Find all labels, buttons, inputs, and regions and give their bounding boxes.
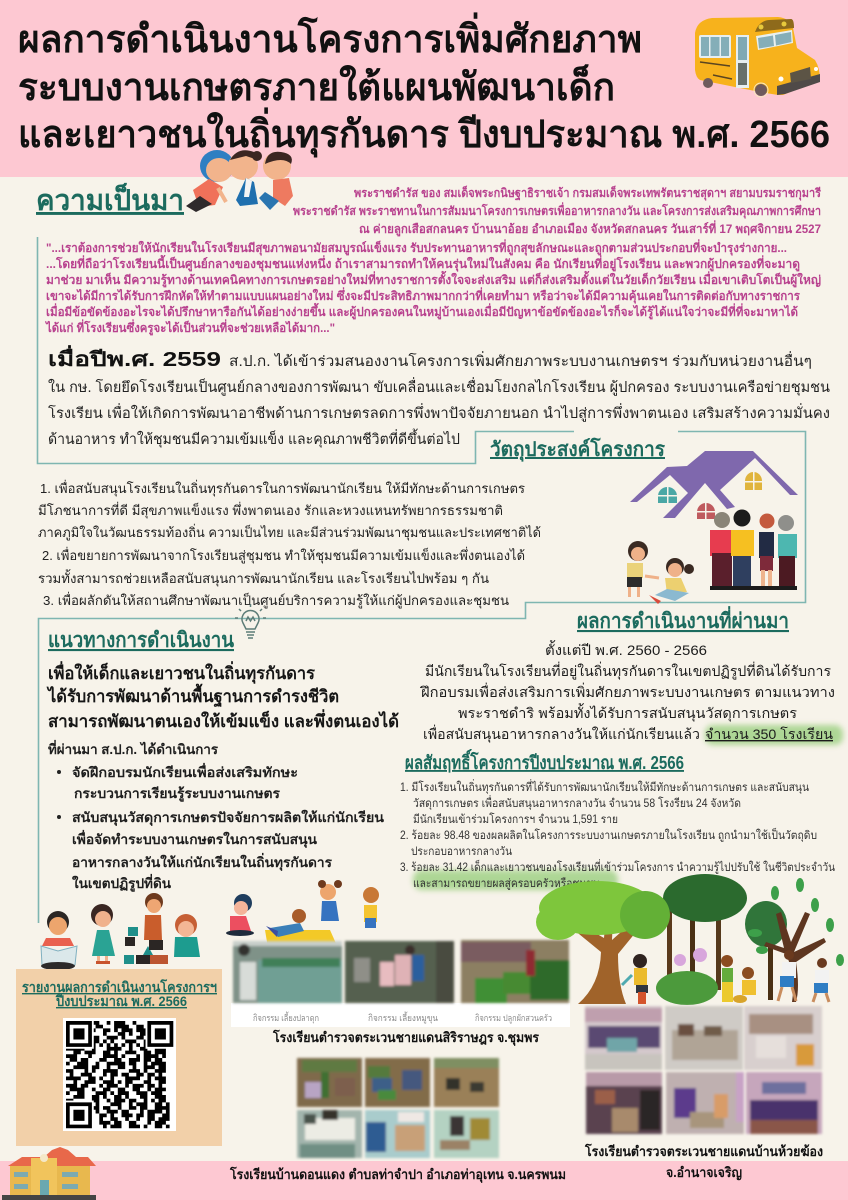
highlight brush xyxy=(705,725,843,745)
background paragraph xyxy=(48,344,830,448)
panel: report QR xyxy=(16,969,222,1146)
royal speech quote: เขาจะได้มีการได้รับการฝึกหัดให้ทำตามแบบแผนอย่างใหม่ ซึ่งจะมีประสิทธิภาพมากกว่าที่เคยทำมา หรือว่าจะได้มีความคุ้นเคยในการติดต่อกับทางราชการ xyxy=(46,287,801,304)
title xyxy=(18,12,830,158)
heading: approach: แนวทางการดำเนินงาน xyxy=(48,629,235,652)
heading: past results: ผลการดำเนินงานที่ผ่านมา xyxy=(577,605,789,633)
royal speech quote: มาช่วย มาเห็น มีความรู้ทางด้านเทคนิคทางการเกษตรอย่างใหม่ที่ทางราชการตั้งใจจะส่งเสริม แต่ก็ส่งเสริมตั้งแต่ในวัยเด็กวัยเรียน เมื่อเขาเติบโตเป็นผู้ใหญ่ xyxy=(46,270,821,288)
icon: children sitting xyxy=(186,150,293,212)
approach activities: สนับสนุนวัสดุการเกษตรปัจจัยการผลิตให้แก่นักเรียน xyxy=(72,809,385,826)
photo captions: กิจกรรม เลี้ยงปลาดุก xyxy=(253,1011,319,1024)
heading: background: ความเป็นมา xyxy=(36,182,184,217)
results paragraph: ตั้งแต่ปี พ.ศ. 2560 - 2566 xyxy=(545,640,707,658)
achievements list xyxy=(400,779,835,890)
achievements list: และสามารถขยายผลสู่ครอบครัวหรือชุมชน xyxy=(413,877,600,890)
royal speech quote xyxy=(44,239,821,336)
footer captions: จ.อำนาจเจริญ xyxy=(666,1165,742,1181)
background paragraph: เมื่อปีพ.ศ. 2559 xyxy=(48,344,221,371)
objectives list: รวมทั้งสามารถช่วยเหลือสนับสนุนการพัฒนานักเรียน และโรงเรียนไปพร้อม ๆ กัน xyxy=(38,569,489,587)
footer band xyxy=(0,1161,848,1200)
results paragraph: มีนักเรียนในโรงเรียนที่อยู่ในถิ่นทุรกันดารในเขตปฏิรูปที่ดินได้รับการ xyxy=(425,662,831,680)
QR caption: รายงานผลการดำเนินงานโครงการฯ xyxy=(22,978,217,995)
approach activities: อาหารกลางวันให้แก่นักเรียนในถิ่นทุรกันดาร xyxy=(72,852,333,871)
illustration: trees and students xyxy=(536,874,844,1005)
royal speech attribution xyxy=(293,185,821,237)
royal speech quote: เมื่อมีข้อขัดข้องอะไรจะได้ปรึกษาหารือกันได้อย่างง่ายขึ้น และผู้ปกครองคนในหมู่บ้านเองเมื่อมีปัญหาข้อขัดข้องอะไรก็จะได้รู้ได้แน่ใจว่าจะมีที่ที่จะมาหาได้ xyxy=(46,302,798,320)
icon: light bulb xyxy=(235,604,266,638)
approach goal statement: ได้รับการพัฒนาด้านพื้นฐานการดำรงชีวิต xyxy=(46,683,339,708)
caption card xyxy=(231,1003,570,1027)
achievements list: 1. มีโรงเรียนในถิ่นทุรกันดารที่ได้รับการพัฒนานักเรียนให้มีทักษะด้านการเกษตร และสนับสนุน xyxy=(400,779,809,794)
objectives list xyxy=(38,480,541,609)
approach activities: เพื่อจัดทำระบบงานเกษตรในการสนับสนุน xyxy=(72,829,318,848)
approach activities: ที่ผ่านมา ส.ป.ก. ได้ดำเนินการ xyxy=(48,739,219,757)
heading: objectives: วัตถุประสงค์โครงการ xyxy=(490,437,665,462)
approach activities: ในเขตปฏิรูปที่ดิน xyxy=(72,873,172,892)
achievements list: มีนักเรียนเข้าร่วมโครงการฯ จำนวน 1,591 ราย xyxy=(413,812,618,826)
header band xyxy=(0,0,848,177)
background paragraph: ด้านอาหาร ทำให้ชุมชนมีความเข้มแข็ง และคุณภาพชีวิตที่ดีขึ้นต่อไป xyxy=(48,428,460,448)
panel: results to date xyxy=(420,605,843,745)
approach activities: กระบวนการเรียนรู้ระบบงานเกษตร xyxy=(74,786,281,802)
royal speech quote: ...โดยที่ถือว่าโรงเรียนนี้เป็นศูนย์กลางของชุมชนแห่งหนึ่ง ถ้าเราสามารถทำให้คนรุ่นใหม่ในสังคม คือ นักเรียนที่อยู่โรงเรียน และพวกผู้ปกครองที่จะมาดู xyxy=(46,254,800,272)
achievements list: ประกอบอาหารกลางวัน xyxy=(411,846,512,858)
photo group: Sirirat school xyxy=(231,940,570,1046)
approach activities: จัดฝึกอบรมนักเรียนเพื่อส่งเสริมทักษะ xyxy=(72,762,298,780)
photo: vegetable garden xyxy=(461,940,569,1003)
royal speech quote: "...เราต้องการช่วยให้นักเรียนในโรงเรียนมีสุขภาพอนามัยสมบูรณ์แข็งแรง รับประทานอาหารที่ถูกสุขลักษณะและถูกตามส่วนประกอบที่จะบำรุงร่างกาย... xyxy=(46,239,787,256)
background paragraph: โรงเรียน เพื่อให้เกิดการพัฒนาอาชีพด้านการเกษตรลดการพึ่งพาปัจจัยภายนอก นำไปสู่การพึ่งพาตนเอง เสริมสร้างความมั่นคง xyxy=(48,403,830,422)
royal speech attribution: ณ ค่ายลูกเสือสกลนคร บ้านนาอ้อย อำเภอเมือง จังหวัดสกลนคร วันเสาร์ที่ 17 พฤศจิกายน 2527 xyxy=(359,220,821,237)
photo group: Huai Khong school xyxy=(584,1006,823,1159)
results paragraph: เพื่อสนับสนุนอาหารกลางวันให้แก่นักเรียนแล้ว xyxy=(423,725,700,743)
photo captions: กิจกรรม เลี้ยงหมูขุน xyxy=(368,1011,438,1024)
icon: school building xyxy=(2,1147,96,1200)
objectives list: 1. เพื่อสนับสนุนโรงเรียนในถิ่นทุรกันดารในการพัฒนานักเรียน ให้มีทักษะด้านการเกษตร xyxy=(40,480,525,497)
school caption: โรงเรียนตำรวจตระเวนชายแดนสิริราษฎร จ.ชุมพร xyxy=(272,1028,540,1046)
results paragraph: พระราชดำริ พร้อมทั้งได้รับการสนับสนุนวัสดุการเกษตร xyxy=(458,703,797,722)
achievements list: วัสดุการเกษตร เพื่อสนับสนุนอาหารกลางวัน จำนวน 58 โรงรียน 24 จังหวัด xyxy=(413,795,741,810)
illustration: houses and family xyxy=(627,451,798,604)
QR caption xyxy=(22,978,217,1009)
QR code xyxy=(63,1018,176,1131)
objectives list: มีโภชนาการที่ดี มีสุขภาพแข็งแรง พึ่งพาตนเอง รักและหวงแหนทรัพยากรธรรมชาติ xyxy=(38,501,503,519)
illustration: children playing xyxy=(41,880,379,970)
title: และเยาวชนในถิ่นทุรกันดาร ปีงบประมาณ พ.ศ. 2566 xyxy=(18,107,830,158)
photo: fish pond xyxy=(233,941,342,1003)
photo: pigs xyxy=(345,941,454,1003)
royal speech quote: ได้แก่ ที่โรงเรียนซึ่งครูจะได้เป็นส่วนที่จะช่วยเหลือได้มาก..." xyxy=(44,319,335,336)
heading: achievements: ผลสัมฤทธิ์โครงการปีงบประมาณ พ.ศ. 2566 xyxy=(405,748,684,773)
results paragraph: จำนวน 350 โรงเรียน xyxy=(705,726,833,742)
results paragraph: ฝึกอบรมเพื่อส่งเสริมการเพิ่มศักยภาพระบบงานเกษตร ตามแนวทาง xyxy=(420,683,835,700)
school caption: โรงเรียนตำรวจตระเวนชายแดนบ้านห้วยฆ้อง xyxy=(584,1142,823,1159)
photo group: Don Daeng school xyxy=(297,1058,499,1158)
footer captions: โรงเรียนบ้านดอนแดง ตำบลท่าจำปา อำเภอท่าอุเทน จ.นครพนม xyxy=(229,1165,566,1183)
panel outline frames xyxy=(38,237,806,923)
title: ผลการดำเนินงานโครงการเพิ่มศักยภาพ xyxy=(18,12,642,61)
results paragraph xyxy=(420,640,835,743)
approach activities xyxy=(48,739,385,892)
background paragraph: ส.ป.ก. ได้เข้าร่วมสนองงานโครงการเพิ่มศักยภาพระบบงานเกษตรฯ ร่วมกับหน่วยงานอื่นๆ xyxy=(229,351,812,370)
approach goal statement xyxy=(46,661,399,731)
approach goal statement: สามารถพัฒนาตนเองให้เข้มแข็ง และพึ่งตนเองได้ xyxy=(48,709,399,731)
panel: achievements xyxy=(400,748,835,890)
objectives list: 2. เพื่อขยายการพัฒนาจากโรงเรียนสู่ชุมชน ทำให้ชุมชนมีความเข้มแข็งและพึ่งตนเองได้ xyxy=(42,546,525,564)
icon: school bus xyxy=(695,17,820,97)
photo captions: กิจกรรม ปลูกผักสวนครัว xyxy=(475,1013,552,1024)
objectives list: ภาคภูมิใจในวัฒนธรรมท้องถิ่น ความเป็นไทย และมีส่วนร่วมพัฒนาชุมชนและประเทศชาติได้ xyxy=(38,523,541,541)
footer captions xyxy=(229,1165,742,1183)
QR caption: ปีงบประมาณ พ.ศ. 2566 xyxy=(55,993,187,1009)
objectives list: 3. เพื่อผลักดันให้สถานศึกษาพัฒนาเป็นศูนย์บริการความรู้ให้แก่ผู้ปกครองและชุมชน xyxy=(43,591,509,609)
approach goal statement: เพื่อให้เด็กและเยาวชนในถิ่นทุรกันดาร xyxy=(48,661,316,684)
panel: approach xyxy=(46,629,399,892)
background paragraph: ใน กษ. โดยยึดโรงเรียนเป็นศูนย์กลางของการพัฒนา ขับเคลื่อนและเชื่อมโยงกลไกโรงเรียน ผู้ปกครอง ระบบงานเครือข่ายชุมชน xyxy=(48,377,830,396)
photo captions xyxy=(253,1011,552,1024)
highlight brush xyxy=(413,870,618,890)
title: ระบบงานเกษตรภายใต้แผนพัฒนาเด็ก xyxy=(18,64,615,109)
